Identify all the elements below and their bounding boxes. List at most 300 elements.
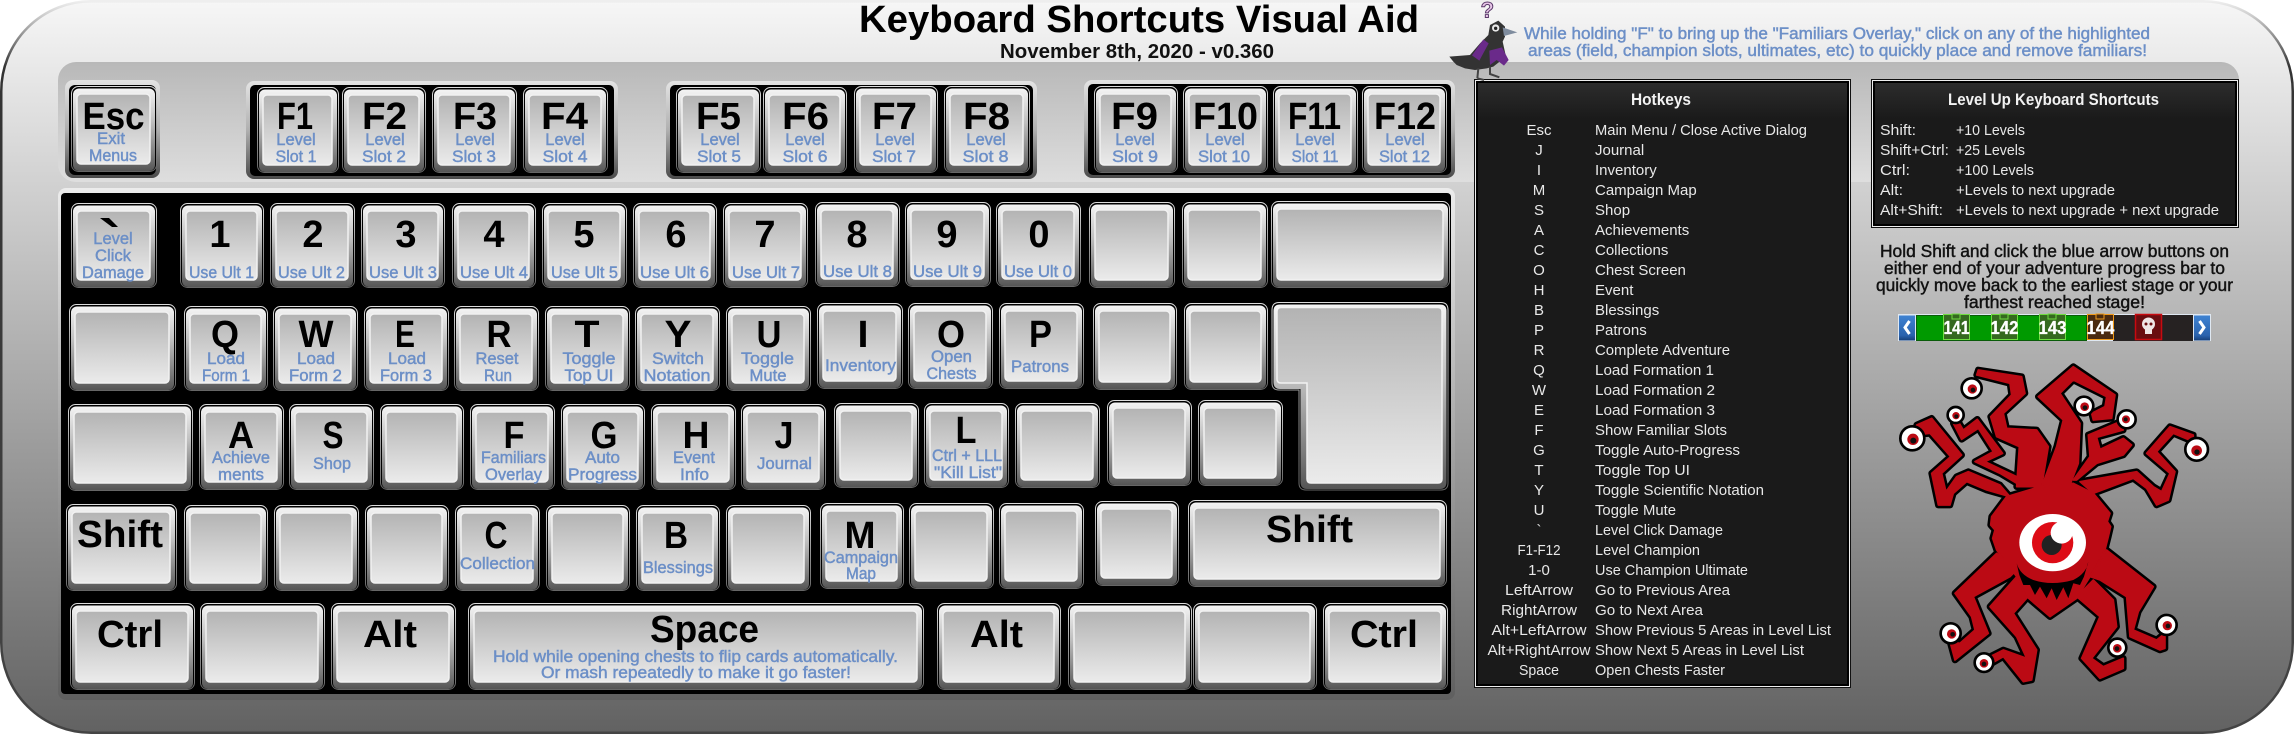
key: 3 — [362, 204, 444, 288]
key: F10: Slot 10 — [1198, 148, 1250, 166]
date and version: November 8th, 2020 - v0.360 — [1000, 41, 1274, 63]
function key groups — [65, 80, 1455, 179]
key: F: Familiars — [481, 449, 546, 467]
hotkey rows: Toggle Mute — [1595, 502, 1676, 519]
hotkey rows: Open Chests Faster — [1595, 662, 1725, 679]
key: F1: Slot 1 — [276, 148, 316, 166]
familiars tip: areas (field, champion slots, ultimates, etc) to quickly place and remove familiars! — [1528, 42, 2147, 60]
hotkey rows: W — [1532, 382, 1547, 399]
key: F10: Level — [1205, 131, 1245, 149]
panel heading: level up: Level Up Keyboard Shortcuts — [1948, 90, 2159, 109]
hotkey rows: O — [1533, 262, 1545, 279]
key: 8: 8 — [846, 214, 868, 256]
key: Space — [468, 604, 924, 690]
key: backtick: Click — [95, 247, 132, 265]
central eye — [2019, 514, 2086, 571]
key: 9: 9 — [936, 214, 958, 256]
key: Y: Notation — [644, 367, 710, 385]
small eyes — [1900, 378, 2208, 672]
key: A — [200, 404, 284, 490]
key: Q — [184, 306, 268, 390]
hotkey rows: Load Formation 1 — [1595, 362, 1714, 379]
key: F6: F6 — [782, 96, 829, 138]
key: left Alt: Alt — [363, 614, 417, 656]
level up rows: Ctrl: — [1880, 162, 1910, 179]
key: W — [274, 306, 358, 390]
hotkey rows: Show Next 5 Areas in Level List — [1595, 642, 1805, 659]
key: 7 — [724, 204, 808, 288]
key: L: L — [956, 410, 976, 452]
key: F7: Slot 7 — [872, 148, 916, 166]
hotkey rows: Y — [1534, 482, 1544, 499]
key: F8 — [944, 86, 1030, 172]
key: blank — [1015, 403, 1100, 488]
key: G: Progress — [568, 466, 637, 484]
hotkey rows: I — [1537, 162, 1541, 179]
key: M: M — [844, 515, 876, 557]
key: 9: Use Ult 9 — [913, 263, 982, 281]
title: Keyboard Shortcuts Visual Aid — [859, 0, 1419, 41]
text block: hold shift instructions: either end of your adventure progress bar to — [1884, 258, 2225, 278]
key: G: Auto — [585, 449, 620, 467]
level up rows: +10 Levels — [1956, 122, 2025, 139]
key: 3: Use Ult 3 — [369, 264, 437, 282]
key: G — [562, 404, 644, 490]
key: 1: Use Ult 1 — [189, 264, 254, 282]
hotkey rows: F1-F12 — [1518, 542, 1560, 559]
key: F12: Slot 12 — [1379, 148, 1430, 166]
key: 3: 3 — [395, 214, 417, 256]
key: Esc: Esc — [82, 96, 144, 138]
key: Esc: Exit — [97, 130, 125, 148]
key: Q: Q — [211, 314, 239, 356]
key: Y — [636, 306, 720, 390]
key: F9: Level — [1115, 131, 1155, 149]
key: 4: Use Ult 4 — [460, 264, 528, 282]
key: backtick: Damage — [82, 264, 144, 282]
key: W: Load — [297, 350, 335, 368]
key: J — [742, 404, 826, 490]
key: G: G — [590, 415, 618, 457]
key: R: R — [486, 314, 512, 356]
key: right Alt — [938, 604, 1060, 690]
key: F11: F11 — [1288, 96, 1341, 138]
key: W: Form 2 — [289, 367, 342, 385]
key: 8 — [816, 202, 900, 286]
stage 144: 144 — [2086, 318, 2114, 338]
panel: level up shortcuts — [1871, 79, 2239, 228]
key: 7: Use Ult 7 — [732, 264, 800, 282]
key: left Ctrl — [70, 604, 194, 690]
key: M: Map — [846, 565, 876, 583]
key: blank — [184, 505, 268, 591]
text block: hold shift instructions: quickly move back to the earliest stage or your — [1876, 275, 2233, 295]
key: P: Patrons — [1011, 358, 1069, 376]
key: blank — [726, 505, 811, 591]
key: blank — [1093, 303, 1177, 390]
key: F6 — [764, 88, 846, 172]
key: H: Event — [673, 449, 715, 467]
hotkey rows: Q — [1533, 362, 1545, 379]
hotkey rows: U — [1534, 502, 1544, 519]
key: U: Toggle — [741, 350, 794, 368]
key: blank — [200, 603, 325, 690]
key: L: "Kill List" — [934, 464, 1002, 482]
hotkey rows: Event — [1595, 282, 1634, 299]
hotkey rows: Toggle Auto-Progress — [1595, 442, 1740, 459]
key: Space: Space — [650, 609, 759, 651]
key: F8: Level — [966, 131, 1006, 149]
key: F4 — [524, 88, 608, 172]
key: P — [1000, 304, 1084, 388]
hotkey rows: Toggle Top UI — [1595, 462, 1690, 479]
key: F9: F9 — [1111, 96, 1158, 138]
key: blank — [834, 403, 919, 488]
key: C: Collection — [460, 555, 535, 573]
key: 0 — [996, 202, 1080, 286]
key: Q: Load — [207, 350, 245, 368]
level up rows: +25 Levels — [1956, 142, 2025, 159]
key: M: Campaign — [824, 549, 898, 567]
key: R — [454, 306, 538, 390]
key: backtick — [72, 204, 156, 288]
key: R: Run — [484, 367, 512, 385]
key: O: Open — [931, 348, 972, 366]
key: T: Toggle — [562, 350, 616, 368]
familiars tip: While holding "F" to bring up the "Familiars Overlay," click on any of the highlighted — [1524, 25, 2150, 43]
key: H: H — [682, 415, 710, 457]
hotkey rows: S — [1534, 202, 1544, 219]
hotkey rows: B — [1534, 302, 1544, 319]
key: Y: Y — [664, 314, 692, 356]
key: I: Inventory — [825, 357, 897, 375]
hotkey rows: Inventory — [1595, 162, 1657, 179]
hotkey rows: Level Click Damage — [1595, 522, 1723, 539]
key: F — [470, 404, 554, 490]
mouth — [2017, 562, 2088, 600]
key: B: Blessings — [643, 559, 713, 577]
key: F5: Slot 5 — [697, 148, 741, 166]
key: left Shift: Shift — [77, 514, 163, 556]
key: C: C — [484, 515, 508, 557]
key: I: I — [858, 314, 868, 356]
key: C — [456, 506, 540, 590]
panel heading: hotkeys: Hotkeys — [1631, 90, 1691, 109]
key: F4: F4 — [541, 96, 588, 138]
key: I — [818, 304, 902, 388]
key: U: U — [756, 314, 782, 356]
key: blank — [1184, 303, 1268, 390]
key: F1: F1 — [277, 96, 313, 138]
key: 4: 4 — [483, 214, 505, 256]
key: blank — [546, 505, 630, 591]
key: right Ctrl — [1324, 604, 1448, 690]
icon: red beholder — [1900, 367, 2208, 682]
key: F5: Level — [700, 131, 740, 149]
key: H — [652, 404, 736, 490]
key: F7: Level — [875, 131, 915, 149]
key: 1 — [180, 204, 264, 288]
key: B — [636, 506, 720, 590]
key: 8: Use Ult 8 — [823, 263, 892, 281]
key: O: Chests — [926, 365, 976, 383]
key: F12 — [1362, 86, 1446, 172]
level up rows: Shift+Ctrl: — [1880, 142, 1949, 159]
key: A: Achieve — [212, 449, 270, 467]
key: E: E — [395, 314, 415, 356]
key: F5: F5 — [696, 96, 741, 138]
key: F3: F3 — [453, 96, 497, 138]
hotkey rows: Use Champion Ultimate — [1595, 562, 1748, 579]
key: Space: Or mash repeatedly to make it go faster! — [541, 664, 851, 682]
key: Esc: Menus — [89, 147, 137, 165]
key: F8: Slot 8 — [962, 148, 1008, 166]
key: F4: Slot 4 — [542, 148, 588, 166]
key: 9 — [906, 202, 990, 286]
hotkey rows: Chest Screen — [1595, 262, 1686, 279]
key: 7: 7 — [754, 214, 776, 256]
hotkey rows: Blessings — [1595, 302, 1659, 319]
left arrow button — [1899, 316, 1915, 340]
key: 5: Use Ult 5 — [551, 264, 618, 282]
key: 0: 0 — [1028, 214, 1050, 256]
key: U: Mute — [750, 367, 786, 385]
hotkey rows: A — [1534, 222, 1544, 239]
main key frame — [58, 188, 1455, 700]
key: blank — [1089, 202, 1175, 288]
key: blank — [380, 404, 464, 490]
key: blank — [1068, 603, 1192, 690]
text block: hold shift instructions: Hold Shift and click the blue arrow buttons on — [1880, 241, 2229, 261]
key: A: A — [228, 415, 254, 457]
key: 2 — [270, 204, 354, 288]
key: tab blank — [69, 304, 176, 391]
key: Esc — [72, 86, 156, 172]
key: F11 — [1274, 86, 1358, 172]
boss stage skull — [2136, 314, 2162, 340]
key: 5: 5 — [573, 214, 595, 256]
key: 2: Use Ult 2 — [278, 264, 345, 282]
key: U — [726, 306, 810, 390]
key: O: O — [937, 314, 965, 356]
key: F4: Level — [545, 131, 585, 149]
hotkey rows: LeftArrow — [1505, 582, 1573, 599]
key: blank — [999, 503, 1084, 589]
hotkey rows: Level Champion — [1595, 542, 1700, 559]
hotkey rows: Load Formation 3 — [1595, 402, 1715, 419]
hotkey rows: Show Familiar Slots — [1595, 422, 1727, 439]
key: right Alt: Alt — [970, 614, 1023, 656]
hotkey rows: C — [1534, 242, 1545, 259]
hotkey rows: Esc — [1526, 122, 1552, 139]
key: 6: Use Ult 6 — [640, 264, 709, 282]
key: E: Form 3 — [380, 367, 432, 385]
key: backspace blank — [1271, 201, 1450, 288]
key: T — [546, 306, 630, 390]
key: S: S — [322, 415, 344, 457]
key: blank — [274, 505, 359, 591]
key: blank — [1095, 501, 1179, 586]
stage 143: 143 — [2038, 318, 2066, 338]
key: E — [364, 306, 448, 390]
panel: hotkeys — [1474, 79, 1851, 688]
key: B: B — [664, 515, 688, 557]
hotkey rows: Collections — [1595, 242, 1668, 259]
hotkey rows: E — [1534, 402, 1544, 419]
hotkey rows: RightArrow — [1501, 602, 1577, 619]
key: T: Top UI — [564, 367, 614, 385]
main key well — [61, 193, 1451, 694]
level up rows: Alt: — [1880, 182, 1903, 199]
level up rows: +100 Levels — [1956, 162, 2034, 179]
key: blank — [365, 505, 449, 591]
key: enter blank — [1272, 302, 1448, 490]
key: right Shift: Shift — [1266, 509, 1353, 551]
key: E: Load — [388, 350, 426, 368]
key: left Alt — [332, 604, 456, 690]
adventure progress bar — [1898, 314, 2211, 341]
key: F1: Level — [276, 131, 316, 149]
key: Space: Hold while opening chests to flip cards automatically. — [493, 648, 898, 666]
key: 6: 6 — [665, 214, 687, 256]
key: F7 — [854, 86, 938, 172]
key: right Shift — [1188, 500, 1446, 586]
icon: crow with question mark — [1449, 0, 1517, 80]
stage 142: 142 — [1990, 318, 2018, 338]
level up rows: Alt+Shift: — [1880, 202, 1943, 219]
hotkey rows: Show Previous 5 Areas in Level List — [1595, 622, 1832, 639]
level up rows: +Levels to next upgrade — [1956, 182, 2115, 199]
key: T: T — [574, 314, 600, 356]
key: blank — [1198, 400, 1283, 486]
key: F6: Level — [785, 131, 825, 149]
key: F12: Level — [1385, 131, 1425, 149]
key: S: Shop — [313, 455, 351, 473]
hotkey rows: G — [1533, 442, 1545, 459]
key: L — [924, 404, 1008, 488]
hotkey rows: Patrons — [1595, 322, 1647, 339]
text block: hold shift instructions: farthest reached stage! — [1964, 292, 2145, 312]
key: F8: F8 — [963, 96, 1010, 138]
key: A: ments — [218, 466, 264, 484]
key: Q: Form 1 — [202, 367, 250, 385]
key: 5 — [542, 204, 626, 288]
key: F: Overlay — [485, 466, 543, 484]
key: blank — [1193, 603, 1317, 690]
key: 4 — [452, 204, 536, 288]
key: O — [908, 304, 992, 388]
key: F2 — [342, 88, 426, 172]
hotkey rows: P — [1534, 322, 1544, 339]
key: backtick: Level — [93, 230, 133, 248]
familiars tip — [1524, 25, 2150, 60]
right arrow button — [2194, 316, 2210, 340]
key: 0: Use Ult 0 — [1004, 263, 1072, 281]
key: 6 — [634, 204, 716, 288]
hotkey rows: Campaign Map — [1595, 182, 1697, 199]
hotkey rows: Go to Previous Area — [1595, 582, 1731, 599]
key: F10 — [1184, 86, 1268, 172]
stage 141: 141 — [1944, 318, 1970, 338]
key: 2: 2 — [302, 214, 324, 256]
hotkey rows: Go to Next Area — [1595, 602, 1704, 619]
key: left Shift — [66, 504, 176, 590]
key: F6: Slot 6 — [782, 148, 828, 166]
key: W: W — [298, 314, 334, 356]
hotkey rows: Shop — [1595, 202, 1630, 219]
hotkey rows: Alt+LeftArrow — [1492, 622, 1587, 639]
upper recessed plate — [58, 62, 2239, 182]
hotkey rows: H — [1534, 282, 1544, 299]
hotkey rows: Alt+RightArrow — [1488, 642, 1591, 659]
key: R: Reset — [476, 350, 519, 368]
hotkey rows: F — [1534, 422, 1544, 439]
key: F11: Slot 11 — [1292, 148, 1338, 166]
key: F1 — [258, 88, 338, 172]
key: F: F — [504, 415, 524, 457]
key: blank — [1182, 202, 1268, 288]
key: S — [290, 404, 374, 490]
hotkey rows: Achievements — [1595, 222, 1689, 239]
hotkey rows: R — [1534, 342, 1545, 359]
key: F3: Slot 3 — [452, 148, 496, 166]
text block: hold shift instructions — [1876, 241, 2233, 312]
key: caps blank — [68, 404, 193, 491]
key: L: Ctrl + LLL — [932, 447, 1002, 465]
key: F9 — [1094, 86, 1178, 172]
stage 141 — [1944, 314, 1970, 340]
key: Y: Switch — [652, 350, 704, 368]
key: F2: Slot 2 — [362, 148, 406, 166]
hotkey rows: ` — [1536, 522, 1542, 539]
hotkey rows: Journal — [1595, 142, 1644, 159]
key: F2: F2 — [362, 96, 407, 138]
hotkey rows: Load Formation 2 — [1595, 382, 1715, 399]
key: H: Info — [680, 466, 709, 484]
hotkey rows — [1488, 122, 1832, 679]
key: blank — [1107, 400, 1192, 486]
hotkey rows: Main Menu / Close Active Dialog — [1595, 122, 1807, 139]
key: 1: 1 — [209, 214, 231, 256]
hotkey rows: Space — [1519, 662, 1559, 679]
hotkey rows: J — [1535, 142, 1543, 159]
key: left Ctrl: Ctrl — [97, 614, 163, 656]
hotkey rows: T — [1534, 462, 1544, 479]
hotkey rows: M — [1533, 182, 1545, 199]
key: P: P — [1029, 314, 1052, 356]
key: F2: Level — [365, 131, 405, 149]
key: F7: F7 — [872, 96, 917, 138]
key: F12: F12 — [1374, 96, 1436, 138]
key: right Ctrl: Ctrl — [1350, 614, 1418, 656]
key: F9: Slot 9 — [1112, 148, 1158, 166]
key: F3: Level — [455, 131, 495, 149]
key: F10: F10 — [1193, 96, 1258, 138]
key: M — [820, 504, 904, 588]
key: F11: Level — [1295, 131, 1335, 149]
key: blank — [909, 503, 994, 589]
level up rows: +Levels to next upgrade + next upgrade — [1956, 202, 2219, 219]
key: F5 — [676, 88, 760, 172]
hotkey rows: Complete Adventure — [1595, 342, 1730, 359]
key: F3 — [432, 88, 516, 172]
level up rows: Shift: — [1880, 122, 1916, 139]
key: J: Journal — [757, 455, 812, 473]
level up rows — [1880, 122, 2219, 219]
hotkey rows: Toggle Scientific Notation — [1595, 482, 1764, 499]
hotkey rows: 1-0 — [1528, 562, 1550, 579]
key: J: J — [774, 415, 794, 457]
